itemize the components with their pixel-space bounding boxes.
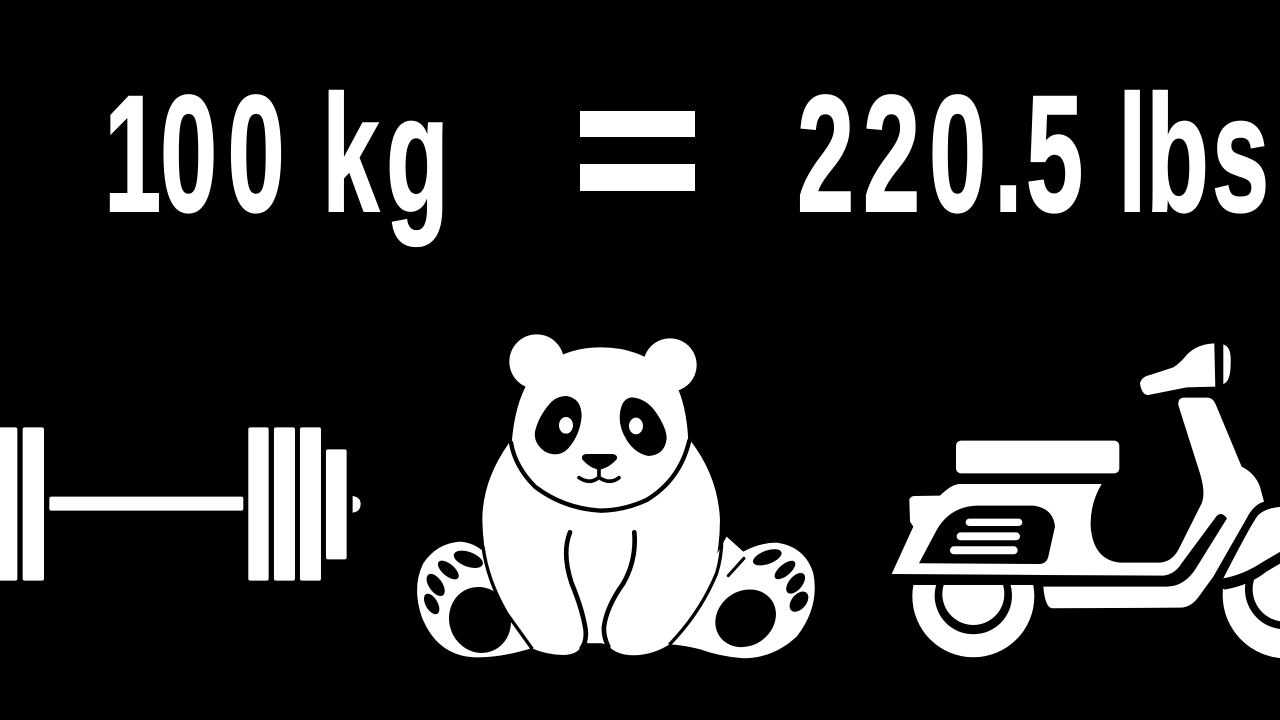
scooter body (892, 398, 1264, 608)
panda body outline over legs (483, 533, 722, 649)
scooter headlamp (1223, 344, 1231, 384)
panda eyes (535, 396, 667, 456)
icon: panda (417, 334, 815, 662)
panda neck line (511, 441, 689, 511)
icon: barbell (0, 427, 361, 581)
scooter seat (956, 441, 1119, 473)
panda body (482, 440, 720, 655)
heading: 220.5 lbs: 220.5 lbs (797, 62, 1269, 247)
icon: equals sign (580, 111, 695, 191)
scooter side panel (919, 506, 1055, 564)
scooter body stripe (1040, 514, 1227, 587)
panda ears (509, 334, 697, 392)
panda arm lines (566, 532, 635, 648)
scooter front wheel (1220, 530, 1280, 658)
scooter rear wheel (900, 535, 1047, 657)
panda foot pads (421, 546, 812, 662)
icon: scooter (892, 343, 1280, 658)
scooter vents (950, 519, 1022, 554)
panda feet (417, 537, 815, 658)
heading: 100 kg: 100 kg (104, 62, 449, 247)
scooter front fender (1223, 507, 1280, 578)
scooter handlebar (1140, 343, 1215, 395)
panda nose and mouth (579, 454, 619, 481)
panda head (512, 347, 688, 510)
